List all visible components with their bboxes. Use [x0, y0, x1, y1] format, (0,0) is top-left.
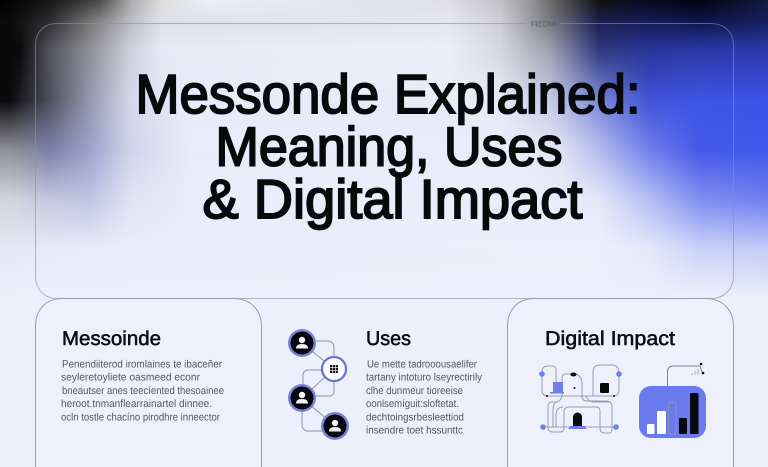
text block: Messoinde description: ocln tostle chacíno pirodhre inneector [61, 412, 220, 424]
text block: Uses description [366, 358, 483, 436]
icon: user node 1 [288, 329, 316, 357]
text block: Messoinde description: seyleretoyliete oasmeed econr [61, 372, 200, 384]
icon: circuit diagram [539, 365, 622, 433]
title: Messonde Explained: [136, 63, 640, 125]
icon: user node 2 [288, 384, 316, 412]
text block: Uses description: oonlsemíguit:sloftetat. [366, 398, 459, 410]
text block: Messoinde description: bneautser anes teecíented thesoainee [62, 385, 224, 397]
icon: bar chart tile [639, 363, 706, 438]
top label: FIEDMI [531, 20, 557, 28]
text block: Uses description: dechtoingsrbesleettiod [366, 412, 464, 424]
hero panel outline [36, 24, 734, 298]
icon: central grid node [322, 357, 346, 381]
panel: Uses [281, 298, 487, 440]
heading: Messoinde: Messoinde [62, 328, 161, 350]
title [136, 63, 640, 230]
text block: Messoinde description [61, 358, 224, 424]
heading: Uses: Uses [366, 328, 411, 350]
text block: Uses description: Ue mette tadrooousaelifer [367, 358, 477, 370]
panel: Messoinde [36, 298, 262, 467]
title: Meaning, Uses [216, 116, 562, 178]
title: & Digital Impact [202, 168, 582, 230]
text block: Uses description: tartany intoturo lseyrectirily [366, 372, 483, 384]
network diagram [288, 329, 349, 440]
text block: Messoinde description: Penendiiterod iromlaines te ibaceñer [62, 358, 222, 370]
panel: Digital Impact [508, 298, 734, 467]
heading: Digital Impact: Digital Impact [545, 328, 675, 350]
icon: user node 3 [321, 412, 349, 440]
text block: Uses description: insendre toet hssunttc [366, 424, 464, 436]
text block: Uses description: clhe dunmeur tioreeise [366, 385, 463, 397]
text block: Messoinde description: heroot.tnmanflearrainartel dinnee. [61, 398, 212, 410]
background gradient field [0, 0, 768, 286]
